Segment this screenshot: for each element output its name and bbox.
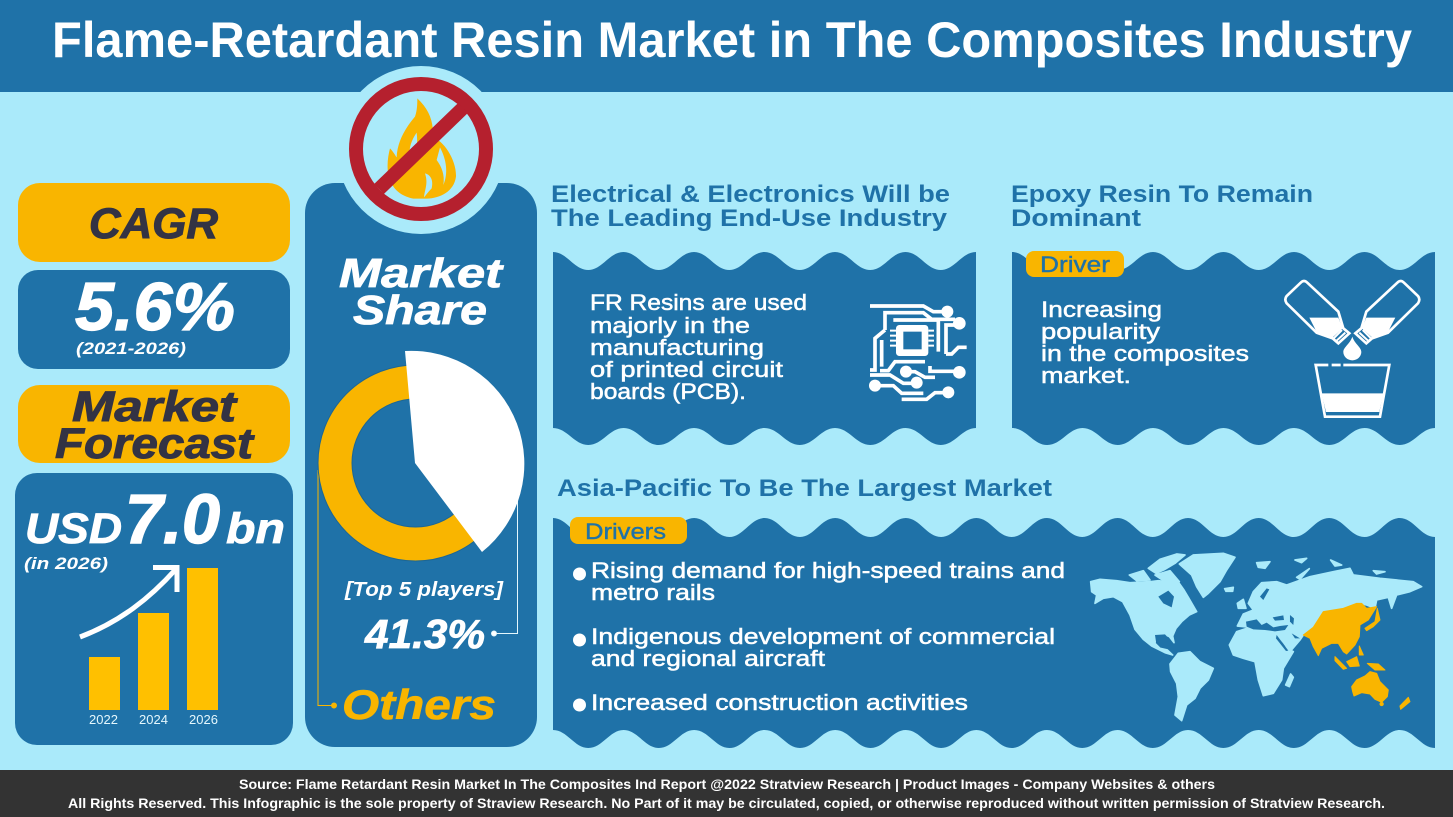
icon: resin bottles and beaker — [1285, 281, 1419, 417]
arrow: growth — [80, 568, 177, 637]
panel: CAGR label — [18, 183, 290, 262]
text block: increasing popularity: market. — [1041, 363, 1131, 388]
panel: CAGR value: 5.6% — [75, 269, 235, 345]
bullet: aircraft: and regional aircraft — [591, 646, 825, 671]
text block: FR resins: boards (PCB). — [590, 379, 746, 404]
text block: FR resins: manufacturing — [590, 335, 764, 360]
bullet: aircraft: Indigenous development of commercial — [591, 624, 1055, 649]
text block: FR resins: majorly in the — [590, 313, 750, 338]
title: Flame-Retardant Resin Market in The Composites Industry — [52, 12, 1412, 68]
forecast value: 7.0 — [125, 480, 220, 558]
bullet: high-speed trains: Rising demand for high-speed trains and — [591, 558, 1065, 583]
bullet: aircraft — [573, 624, 1055, 671]
bullet: high-speed trains: metro rails — [591, 580, 715, 605]
heading: asia-pacific: Asia-Pacific To Be The Largest Market — [557, 475, 1052, 502]
bullet: construction: Increased construction activities — [591, 690, 968, 715]
text block: FR resins — [590, 290, 807, 404]
heading: electrical and electronics: The Leading End-Use Industry — [551, 205, 948, 232]
text block: increasing popularity — [1041, 297, 1249, 388]
badge: drivers: Drivers — [585, 519, 666, 544]
label: top 5 players: [Top 5 players] — [344, 579, 504, 601]
badge: driver: Driver — [1040, 252, 1110, 277]
text block: increasing popularity: in the composites — [1041, 341, 1249, 366]
heading: electrical and electronics — [551, 181, 950, 232]
footer — [0, 770, 1453, 817]
text block: FR resins: FR Resins are used — [590, 290, 807, 315]
icon: no flame — [337, 66, 505, 234]
forecast value: bn — [226, 505, 285, 553]
panel: market forecast label — [18, 383, 290, 468]
footer: All Rights Reserved. This Infographic is the sole property of Straview Research. No Part of it may be circulated, copied, or otherwise reproduced without written permission of Stratview Research. — [68, 796, 1385, 811]
footer: Source: Flame Retardant Resin Market In The Composites Ind Report @2022 Stratview Research | Product Images - Company Websites & others — [239, 777, 1215, 792]
panel: market forecast value and chart — [15, 473, 293, 745]
icon: circuit chip — [869, 306, 967, 399]
bar chart: 2026 — [189, 712, 218, 727]
bullet: high-speed trains — [573, 558, 1065, 605]
world map — [1091, 553, 1422, 721]
heading: epoxy resin: Dominant — [1011, 205, 1141, 232]
heading: market share: Share — [353, 287, 487, 333]
heading: epoxy resin: Epoxy Resin To Remain — [1011, 181, 1313, 208]
header band — [0, 0, 1453, 92]
forecast value: USD — [25, 505, 122, 553]
panel: market forecast label: Market — [72, 383, 238, 431]
leader line: top 5 players — [492, 500, 518, 636]
leader line: others — [318, 470, 336, 708]
donut chart — [318, 351, 524, 561]
heading: market share — [339, 250, 505, 333]
heading: epoxy resin — [1011, 181, 1313, 232]
text block: FR resins: of printed circuit — [590, 357, 783, 382]
forecast value: (in 2026) — [24, 554, 108, 573]
badge: driver — [1026, 251, 1124, 277]
badge: drivers — [570, 517, 687, 544]
panel: market forecast label: Forecast — [55, 420, 255, 468]
heading: market share: Market — [339, 250, 505, 296]
panel: CAGR value: (2021-2026) — [76, 339, 186, 358]
forecast value — [24, 480, 285, 573]
label: top 5 players: 41.3% — [364, 611, 485, 657]
bar chart: 2022 — [89, 712, 118, 727]
panel: CAGR value — [18, 269, 290, 369]
label: top 5 players — [344, 579, 504, 657]
text block: increasing popularity: Increasing — [1041, 297, 1162, 322]
heading: electrical and electronics: Electrical & Electronics Will be — [551, 181, 950, 208]
panel: asia-pacific — [553, 517, 1435, 748]
bar chart: 2024 — [139, 712, 168, 727]
panel: CAGR label: CAGR — [89, 200, 218, 248]
panel: market share — [305, 66, 537, 747]
bar chart — [89, 568, 218, 727]
label: others: Others — [342, 681, 496, 728]
panel: electrical and electronics — [553, 252, 976, 445]
panel: epoxy resin — [1012, 251, 1435, 445]
text block: increasing popularity: popularity — [1041, 319, 1160, 344]
